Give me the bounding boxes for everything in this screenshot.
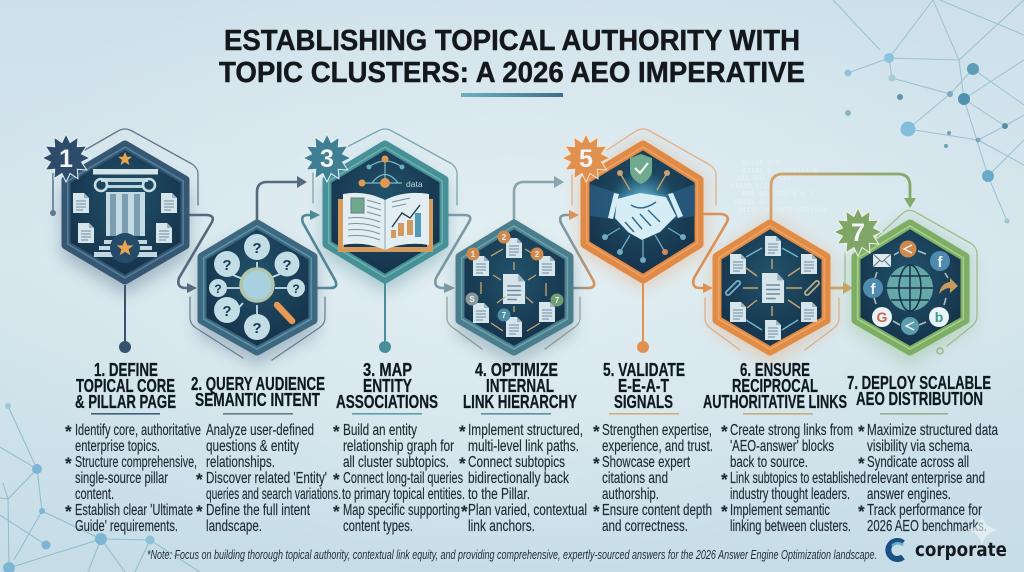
title: TOPIC CLUSTERS: A 2026 AEO IMPERATIVE bbox=[219, 57, 805, 89]
heading: step 2: SEMANTIC INTENT bbox=[195, 389, 321, 410]
text block: step 3: relationship graph for bbox=[343, 438, 454, 455]
badge: 7: 7 bbox=[851, 219, 865, 247]
connector: 6 to 7 top bbox=[771, 174, 910, 220]
heading underlines bbox=[91, 413, 948, 415]
heading: step 5: SIGNALS bbox=[614, 391, 673, 412]
text block: step 5: and correctness. bbox=[602, 518, 688, 535]
outline: hexagon 5 bbox=[572, 129, 716, 205]
icon: connector nodes bbox=[602, 170, 686, 263]
outline: hexagon 2 bbox=[190, 297, 325, 360]
text block: step 4: bidirectionally back bbox=[468, 470, 570, 487]
heading: step 3: ASSOCIATIONS bbox=[336, 391, 438, 412]
heading: step 6 bbox=[703, 359, 847, 412]
icon: number badges: 1 bbox=[471, 250, 476, 259]
badge: 5: 5 bbox=[579, 145, 593, 173]
text block: step 3 bbox=[333, 422, 465, 535]
badge: 7 bbox=[834, 208, 882, 256]
heading: step 1: TOPICAL CORE bbox=[76, 375, 175, 396]
icon: number badges: 2 bbox=[502, 233, 507, 242]
icon: magnifier bbox=[241, 269, 292, 321]
text block: step 6: back to source. bbox=[730, 454, 808, 471]
network decoration: top right bbox=[833, 0, 1024, 224]
heading: step 7 bbox=[847, 372, 991, 409]
step 3 icon: open book and data bbox=[323, 145, 448, 293]
icon: channel circles: f bbox=[870, 281, 876, 298]
text block: step 1: Guide' requirements. bbox=[75, 518, 178, 535]
step 5 icon: handshake and shield bbox=[579, 138, 706, 290]
icon: top star bbox=[118, 152, 132, 165]
text block: step 1: Establish clear 'Ultimate bbox=[75, 502, 193, 519]
text block: step 4: Connect subtopics bbox=[468, 454, 565, 471]
text block: step 1 bbox=[65, 422, 201, 535]
text block: step 3: * bbox=[333, 422, 340, 441]
text block: step 5: * bbox=[593, 422, 600, 441]
binary data decoration: 01101 050 bbox=[742, 160, 780, 168]
text block: step 1: * bbox=[65, 422, 72, 441]
heading: step 4: 4. OPTIMIZE bbox=[475, 359, 558, 380]
text block: step 5: authorship. bbox=[602, 486, 659, 503]
icon: question bubbles: ? bbox=[292, 282, 300, 296]
connector: 4 to 5 lower bbox=[560, 215, 594, 288]
text block: step 4: * bbox=[461, 502, 468, 521]
text block: step 7: * bbox=[858, 502, 865, 521]
text block: step 7: visibility via schema. bbox=[867, 438, 973, 455]
binary data decoration: 101 001 : 010 bbox=[736, 175, 791, 183]
icon: data graph: data bbox=[406, 179, 423, 189]
icon: handshake bbox=[608, 193, 683, 240]
text block: step 7 bbox=[858, 422, 998, 535]
icon: number badges: 7 bbox=[502, 311, 507, 320]
badge: 1: 1 bbox=[59, 145, 73, 173]
text block: step 1: single-source pillar bbox=[75, 470, 168, 487]
text block: step 6: Implement semantic bbox=[730, 502, 830, 519]
text block: step 6: * bbox=[721, 470, 728, 489]
network decoration: bottom left bbox=[0, 403, 200, 572]
text block: step 1: Structure comprehensive, bbox=[75, 454, 197, 471]
icon: question bubbles: ? bbox=[222, 257, 232, 274]
text block: step 6 bbox=[721, 422, 866, 535]
text block: step 7: answer engines. bbox=[867, 486, 951, 503]
text block: step 5 bbox=[593, 422, 713, 535]
step 7 icon: globe and channels bbox=[850, 217, 973, 366]
outline: hexagon 6 bbox=[705, 298, 839, 350]
icon: link arrows bbox=[481, 249, 546, 331]
title underline bbox=[461, 93, 563, 97]
text block: step 6: Link subtopics to established bbox=[730, 470, 866, 487]
text block: step 4: * bbox=[459, 422, 466, 441]
text block: step 6: 'AEO-answer' blocks bbox=[730, 438, 834, 455]
text block: step 6: linking between clusters. bbox=[730, 518, 851, 535]
text block: step 2: Discover related 'Entity' bbox=[206, 470, 327, 487]
icon: channel circles bbox=[863, 240, 958, 335]
icon: documents bbox=[73, 193, 177, 243]
heading: step 4 bbox=[463, 359, 577, 412]
icon: question bubbles: ? bbox=[252, 320, 262, 337]
icon: number badges: 7 bbox=[555, 296, 560, 305]
binary data decoration: 03151 0 bbox=[734, 199, 763, 207]
text block: step 4: multi-level link paths. bbox=[468, 438, 579, 455]
heading: step 3 bbox=[336, 359, 438, 412]
text block: step 1: content. bbox=[75, 486, 114, 503]
icon: question bubbles: ? bbox=[222, 303, 232, 320]
icon: channel circles: f bbox=[938, 254, 944, 271]
connector: 5 to 6 bbox=[693, 214, 728, 288]
connector: 1 to 2 bbox=[178, 215, 213, 288]
outline: hexagon 7 bbox=[845, 210, 977, 346]
binary data decoration: 03101 0 : 310111 0 bbox=[742, 168, 818, 176]
text block: step 3: all cluster subtopics. bbox=[343, 454, 449, 471]
text block: step 1: * bbox=[65, 502, 72, 521]
heading: step 5: 5. VALIDATE bbox=[603, 359, 685, 380]
icon: data graph bbox=[358, 156, 423, 189]
icon: documents bbox=[473, 238, 555, 337]
text block: step 5: Showcase expert bbox=[602, 454, 690, 471]
title bbox=[219, 25, 805, 89]
text block: step 2: questions & entity bbox=[206, 438, 299, 455]
outline: hexagon 4 bbox=[447, 297, 580, 349]
connector: 6 to 7 bbox=[830, 287, 845, 289]
icon: number badges bbox=[466, 230, 564, 322]
binary data decoration bbox=[730, 160, 826, 215]
icon: question bubbles: ? bbox=[214, 282, 222, 296]
text block: step 4: link anchors. bbox=[468, 518, 535, 535]
badge: 1 bbox=[42, 134, 90, 182]
text block: step 1: Identify core, authoritative bbox=[75, 422, 201, 439]
text block: step 5: Strengthen expertise, bbox=[602, 422, 712, 439]
decorative outlines and connectors bbox=[85, 129, 977, 360]
title: ESTABLISHING TOPICAL AUTHORITY WITH bbox=[224, 25, 800, 57]
text block: step 5: experience, and trust. bbox=[602, 438, 713, 455]
step 1 icon: pillar bbox=[62, 145, 189, 295]
outline: hexagon 3 bbox=[313, 129, 457, 205]
text block: step 4: to the Pillar. bbox=[468, 486, 530, 503]
icon: chain links bbox=[728, 283, 817, 293]
text block: step 2: * bbox=[196, 502, 203, 521]
text block: step 6: * bbox=[721, 502, 728, 521]
icon: link arrows bbox=[743, 248, 802, 330]
text block: step 6: Create strong links from bbox=[730, 422, 853, 439]
icon: column bbox=[93, 169, 158, 257]
heading: step 1: 1. DEFINE bbox=[94, 359, 158, 380]
text block: step 3: Build an entity bbox=[343, 422, 417, 439]
text block: step 7: Track performance for bbox=[867, 502, 982, 519]
icon: number badges: 2 bbox=[535, 250, 540, 259]
text block: step 2: landscape. bbox=[206, 518, 262, 535]
text block: step 3: content types. bbox=[343, 518, 413, 535]
icon: channel circles: b bbox=[935, 309, 943, 325]
text block: step 2 bbox=[196, 422, 341, 535]
pins under hexagons bbox=[50, 173, 943, 354]
heading: step 3: 3. MAP bbox=[363, 359, 412, 380]
sparkle bbox=[965, 514, 999, 546]
arrowheads bbox=[187, 176, 916, 294]
binary data decoration: 11510 1110 : bbox=[730, 183, 780, 191]
text block: step 7: Syndicate across all bbox=[867, 454, 969, 471]
badge: 3: 3 bbox=[320, 145, 334, 173]
step 4 icon: linked documents bbox=[456, 224, 573, 365]
icon: glow and band bbox=[590, 171, 695, 239]
icon: book bbox=[338, 193, 433, 252]
badge: 5 bbox=[562, 134, 610, 182]
icon: shield bbox=[630, 154, 652, 184]
connector: 2 to 3 bbox=[257, 182, 298, 219]
text block: step 5: citations and bbox=[602, 470, 668, 487]
heading: step 3: ENTITY bbox=[363, 375, 412, 396]
text block: step 3: Map specific supporting bbox=[343, 502, 460, 519]
heading: step 2: 2. QUERY AUDIENCE bbox=[191, 373, 325, 394]
text block: step 3: * bbox=[333, 470, 340, 489]
text block: step 3: to primary topical entities. bbox=[342, 486, 465, 503]
icon: globe bbox=[887, 265, 933, 311]
badge: 3 bbox=[303, 134, 351, 182]
icon: documents bbox=[730, 236, 817, 340]
icon: question bubbles: ? bbox=[282, 257, 292, 274]
icon: question bubbles bbox=[209, 234, 305, 340]
text block: step 2: Define the full intent bbox=[206, 502, 310, 519]
heading: step 6: AUTHORITATIVE LINKS bbox=[703, 391, 847, 412]
icon: number badges: S bbox=[469, 295, 475, 304]
heading: step 5 bbox=[603, 359, 685, 412]
binary data decoration: 31110 3011000 0001110 bbox=[738, 207, 826, 215]
text block: step 2: * bbox=[196, 470, 203, 489]
text block: step 1: * bbox=[65, 454, 72, 473]
text block: step 3: Connect long-tail queries bbox=[343, 470, 463, 487]
heading: step 4: LINK HIERARCHY bbox=[463, 391, 577, 412]
logo: corporate: corporate bbox=[915, 539, 1007, 561]
text block: step 2: relationships. bbox=[206, 454, 275, 471]
text block: step 7: * bbox=[858, 454, 865, 473]
step 2 icon: magnifier and questions bbox=[198, 224, 317, 365]
heading: step 6: 6. ENSURE bbox=[740, 359, 810, 380]
text block: step 1: enterprise topics. bbox=[75, 438, 160, 455]
text block: step 4 bbox=[459, 422, 587, 535]
connector: 2 to 3 lower bbox=[302, 215, 336, 288]
heading: step 2 bbox=[191, 373, 325, 410]
step 6 icon: reciprocal links bbox=[711, 217, 832, 364]
outline: hexagon 1 bbox=[85, 129, 198, 205]
heading: step 1 bbox=[75, 359, 176, 412]
heading: step 6: RECIPROCAL bbox=[732, 375, 818, 396]
text block: step 2: queries and search variations. bbox=[206, 486, 341, 503]
icon: question bubbles: ? bbox=[252, 240, 262, 257]
connector: 4 to 5 bbox=[514, 182, 556, 219]
text block: step 4: Plan varied, contextual bbox=[468, 502, 587, 519]
text block: step 7: * bbox=[858, 422, 865, 441]
text block: step 6: * bbox=[721, 422, 728, 441]
heading: step 5: E-E-A-T bbox=[618, 375, 670, 396]
binary data decoration: 080 001 011 0 0 7 bbox=[742, 191, 813, 199]
text block: step 3: * bbox=[333, 502, 340, 521]
text block: step 4: * bbox=[459, 454, 466, 473]
text block: step 4: Implement structured, bbox=[468, 422, 583, 439]
text block: step 5: * bbox=[593, 502, 600, 521]
text block: step 5: * bbox=[593, 454, 600, 473]
text block: step 6: industry thought leaders. bbox=[730, 486, 850, 503]
text block: step 2: Analyze user-defined bbox=[206, 422, 314, 439]
heading: step 4: INTERNAL bbox=[486, 375, 554, 396]
heading: step 1: & PILLAR PAGE bbox=[75, 391, 176, 412]
icon: star seal bbox=[110, 233, 140, 263]
text block: step 5: Ensure content depth bbox=[602, 502, 712, 519]
connector: 3 to 4 bbox=[435, 215, 470, 288]
icon: channel circles: G bbox=[877, 309, 888, 325]
